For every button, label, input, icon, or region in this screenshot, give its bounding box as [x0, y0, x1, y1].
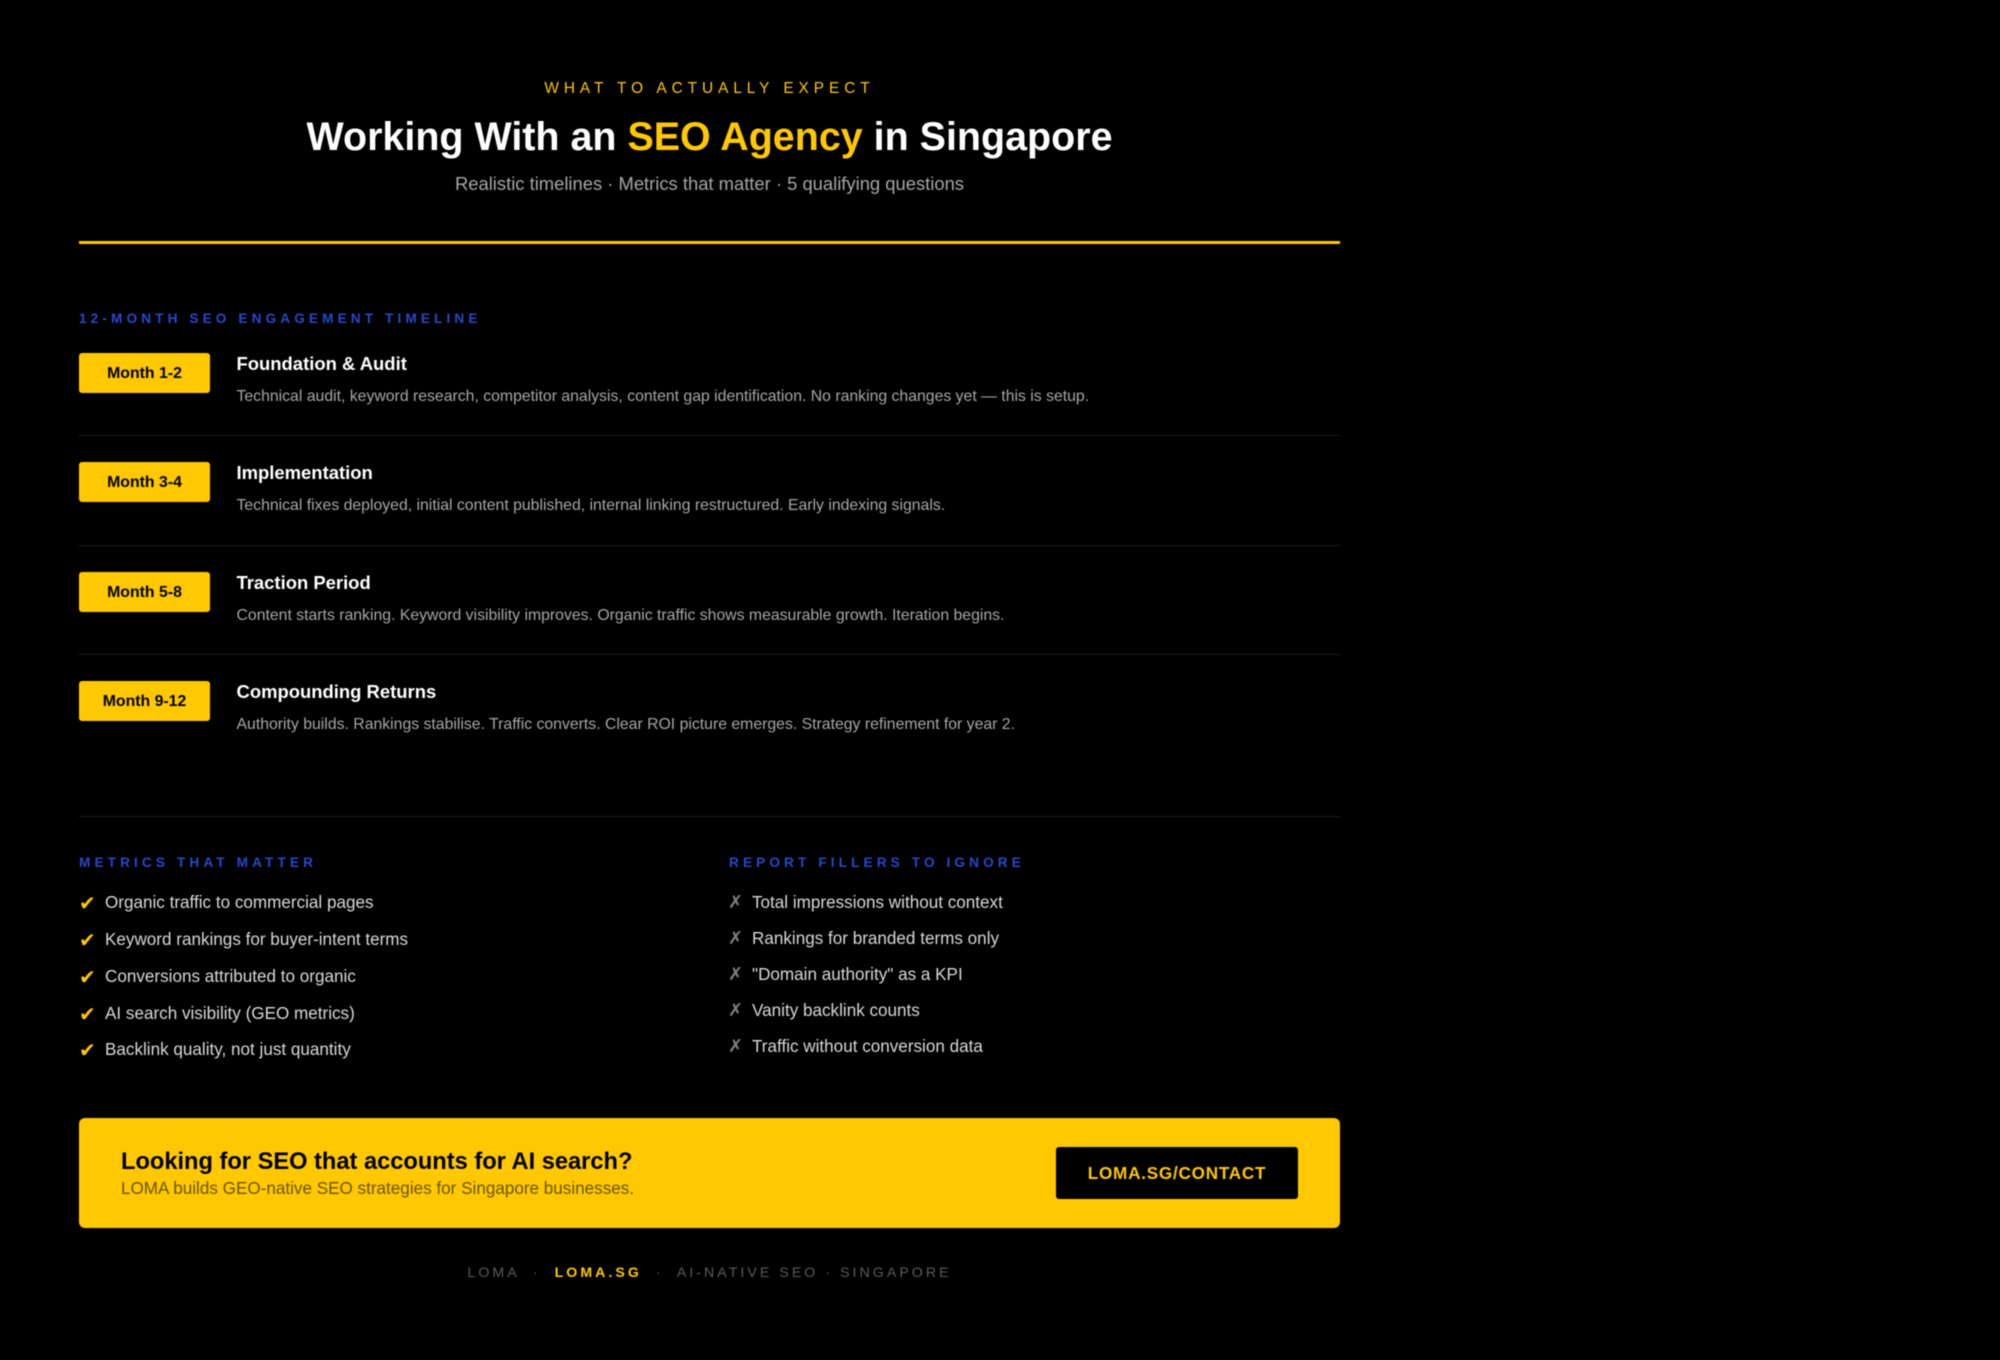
- badge: month 9-12: Month 9-12: [103, 693, 186, 710]
- cross item 3: "Domain authority" as a KPI: [752, 965, 963, 984]
- cross item 4: Vanity backlink counts: [752, 1001, 920, 1020]
- row title: Foundation & Audit: [236, 353, 407, 374]
- check item 3: Conversions attributed to organic: [105, 967, 356, 986]
- check item 2: ✔: [79, 928, 96, 952]
- check item 4: ✔: [79, 1002, 96, 1026]
- badge: month 1-2: Month 1-2: [107, 365, 182, 382]
- check item 5: ✔: [79, 1038, 96, 1062]
- cross item 1: Total impressions without context: [752, 893, 1003, 912]
- check item 2: Keyword rankings for buyer-intent terms: [105, 930, 408, 949]
- eyebrow: WHAT TO ACTUALLY EXPECT: [544, 80, 875, 97]
- cta button: LOMA.SG/CONTACT: [1088, 1163, 1266, 1183]
- cross item 5: Traffic without conversion data: [752, 1037, 983, 1056]
- row title: Traction Period: [236, 572, 371, 593]
- panel: metrics that matter: [79, 855, 408, 1062]
- section heading: metrics: METRICS THAT MATTER: [79, 855, 317, 870]
- cross item 1: ✗: [728, 892, 743, 913]
- cta text: LOMA builds GEO-native SEO strategies for Singapore businesses.: [121, 1179, 634, 1198]
- cross item 3: ✗: [728, 964, 743, 985]
- row description: Technical audit, keyword research, competitor analysis, content gap identification. No ranking changes yet — this is setup.: [236, 388, 1089, 405]
- row description: Content starts ranking. Keyword visibility improves. Organic traffic shows measurable growth. Iteration begins.: [236, 607, 1004, 624]
- check item 1: ✔: [79, 891, 96, 915]
- check item 1: Organic traffic to commercial pages: [105, 893, 374, 912]
- badge: month 5-8: [79, 572, 210, 612]
- footer: LOMA · LOMA.SG · AI-NATIVE SEO · SINGAPORE: [467, 1264, 952, 1280]
- badge: month 3-4: [79, 462, 210, 502]
- cross item 4: ✗: [728, 1000, 743, 1021]
- cta button: [1056, 1147, 1298, 1199]
- row description: Technical fixes deployed, initial content published, internal linking restructured. Early indexing signals.: [236, 497, 945, 514]
- check item 3: ✔: [79, 965, 96, 989]
- timeline row 1: [78, 352, 1089, 406]
- badge: month 3-4: Month 3-4: [107, 474, 182, 491]
- check item 4: AI search visibility (GEO metrics): [105, 1004, 355, 1022]
- cross item 2: Rankings for branded terms only: [752, 929, 999, 948]
- panel: report fillers to ignore: [728, 855, 1025, 1057]
- panel: call to action: [79, 1118, 1340, 1228]
- header rule: [79, 241, 1340, 244]
- subtitle: Realistic timelines · Metrics that matter · 5 qualifying questions: [455, 173, 964, 194]
- cross item 5: ✗: [728, 1036, 743, 1057]
- timeline row 4: [78, 680, 1015, 734]
- timeline row 2: [78, 461, 945, 514]
- row title: Compounding Returns: [236, 681, 436, 702]
- check item 5: Backlink quality, not just quantity: [105, 1040, 351, 1059]
- cross item 2: ✗: [728, 928, 743, 949]
- row description: Authority builds. Rankings stabilise. Traffic converts. Clear ROI picture emerges. Strategy refinement for year 2.: [236, 716, 1015, 733]
- cta heading: Looking for SEO that accounts for AI search?: [121, 1149, 632, 1175]
- badge: month 9-12: [79, 681, 210, 721]
- title: Working With an SEO Agency in Singapore: [306, 115, 1112, 159]
- timeline row 3: [78, 571, 1004, 624]
- section heading: fillers: REPORT FILLERS TO IGNORE: [729, 855, 1025, 870]
- badge: month 1-2: [79, 353, 210, 393]
- badge: month 5-8: Month 5-8: [107, 584, 182, 601]
- row title: Implementation: [236, 462, 373, 483]
- section heading: timeline: 12-MONTH SEO ENGAGEMENT TIMELINE: [79, 311, 482, 326]
